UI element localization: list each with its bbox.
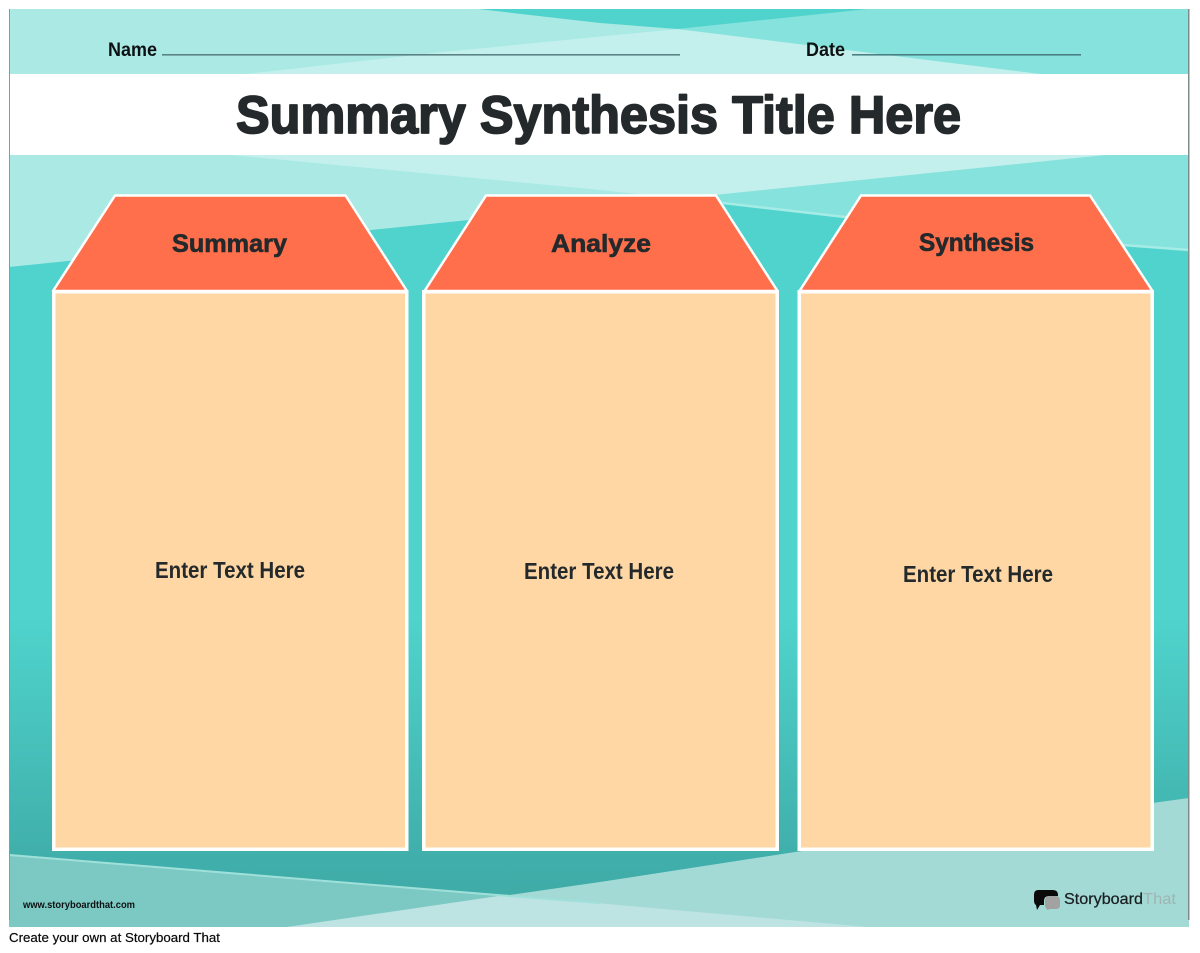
synthesis text box xyxy=(799,292,1152,849)
analyze text box: Enter Text Here xyxy=(524,558,674,584)
website url: www.storyboardthat.com xyxy=(22,899,135,911)
analyze header: Analyze xyxy=(551,230,651,258)
footer caption: Create your own at Storyboard That xyxy=(9,930,220,945)
panel: analyze xyxy=(424,196,778,849)
panel: summary xyxy=(53,196,407,849)
synthesis text box: Enter Text Here xyxy=(903,561,1053,587)
synthesis header: Synthesis xyxy=(919,229,1034,257)
panel: synthesis xyxy=(799,196,1152,849)
logo: storyboard that: Storyboard xyxy=(1064,891,1143,908)
title banner xyxy=(10,74,1188,155)
summary text box: Enter Text Here xyxy=(155,557,305,583)
summary text box xyxy=(54,292,407,849)
analyze header xyxy=(424,196,778,291)
date field: Date xyxy=(806,40,845,61)
analyze text box xyxy=(424,292,777,849)
synthesis header xyxy=(800,196,1152,291)
logo: storyboard that: That xyxy=(1143,891,1177,908)
summary header xyxy=(53,196,407,291)
title banner: Summary Synthesis Title Here xyxy=(236,86,961,145)
name field: Name xyxy=(108,40,157,61)
logo: storyboard that xyxy=(1034,890,1177,910)
icon: speech bubbles xyxy=(1034,890,1060,910)
summary header: Summary xyxy=(172,230,287,258)
